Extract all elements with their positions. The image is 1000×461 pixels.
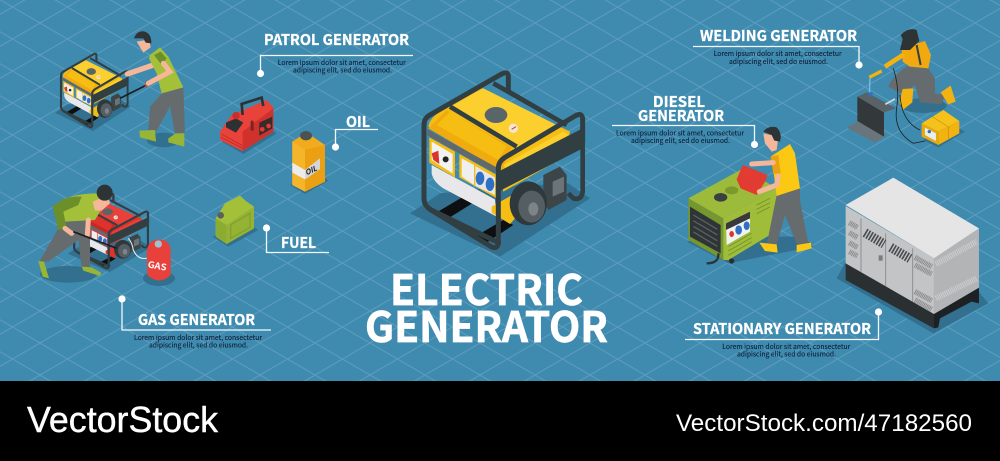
figure: crouching man: [38, 185, 117, 283]
icon: gas cylinder with hose: GAS: [147, 257, 168, 274]
illustration: stationary generator: [837, 178, 988, 333]
welding machine: [922, 110, 965, 147]
label: gas generator: GAS GENERATOR: [138, 309, 255, 330]
footer bar: [0, 381, 1000, 461]
footer bar: VectorStock: [27, 399, 219, 440]
green generator: [688, 168, 778, 264]
label: welding generator: WELDING GENERATOR: [700, 25, 857, 46]
illustration: gas generator with man: [38, 185, 175, 286]
footer bar: VectorStock.com/47182560: [676, 410, 972, 437]
welder figure: [869, 29, 956, 143]
icon: oil bottle: [290, 131, 328, 194]
man pouring fuel: [737, 127, 812, 253]
label: patrol generator: Lorem ipsum dolor sit amet, consectetur: [278, 58, 406, 68]
label: diesel generator: [612, 91, 758, 148]
icon: red generator: [68, 194, 151, 272]
label: stationary generator: [685, 308, 882, 360]
title: ELECTRIC: [390, 257, 583, 318]
title: [365, 257, 608, 355]
label: gas generator: [118, 295, 271, 351]
label: diesel generator: GENERATOR: [638, 105, 724, 126]
label: gas generator: adipiscing elit, sed do eiusmod.: [149, 341, 248, 351]
label: welding generator: Lorem ipsum dolor sit amet, consectetur: [714, 49, 842, 59]
illustration: diesel generator with man: [687, 127, 813, 264]
label: stationary generator: STATIONARY GENERATOR: [693, 318, 871, 339]
icon: green fuel can: [213, 196, 258, 247]
label: oil: [332, 111, 378, 151]
label: stationary generator: Lorem ipsum dolor sit amet, consectetur: [722, 342, 851, 352]
label: patrol generator: [257, 29, 413, 77]
label: fuel: FUEL: [281, 232, 316, 253]
label: diesel generator: adipiscing elit, sed do eiusmod.: [631, 136, 730, 146]
icon: oil bottle: OIL: [303, 163, 319, 178]
figure: man pulling cord: [120, 31, 185, 147]
illustration: patrol generator with man: [55, 31, 185, 147]
label: diesel generator: DIESEL: [653, 91, 705, 112]
label: welding generator: [693, 25, 863, 69]
icon: red inverter generator: [220, 98, 277, 154]
label: oil: OIL: [346, 111, 370, 132]
icon: small yellow generator: [55, 54, 131, 131]
label: fuel: [263, 224, 329, 253]
label: patrol generator: adipiscing elit, sed do eiusmod.: [293, 66, 392, 76]
label: diesel generator: Lorem ipsum dolor sit amet, consectetur: [616, 128, 744, 138]
label: welding generator: adipiscing elit, sed do eiusmod.: [729, 57, 828, 67]
label: patrol generator: PATROL GENERATOR: [264, 29, 409, 50]
label: stationary generator: adipiscing elit, sed do eiusmod.: [737, 350, 836, 360]
illustration: main yellow generator: [410, 73, 590, 257]
illustration: welding generator and welder: [847, 29, 965, 147]
metal workpiece: [847, 92, 896, 143]
title: GENERATOR: [365, 294, 608, 355]
label: gas generator: Lorem ipsum dolor sit amet, consectetur: [134, 333, 262, 343]
